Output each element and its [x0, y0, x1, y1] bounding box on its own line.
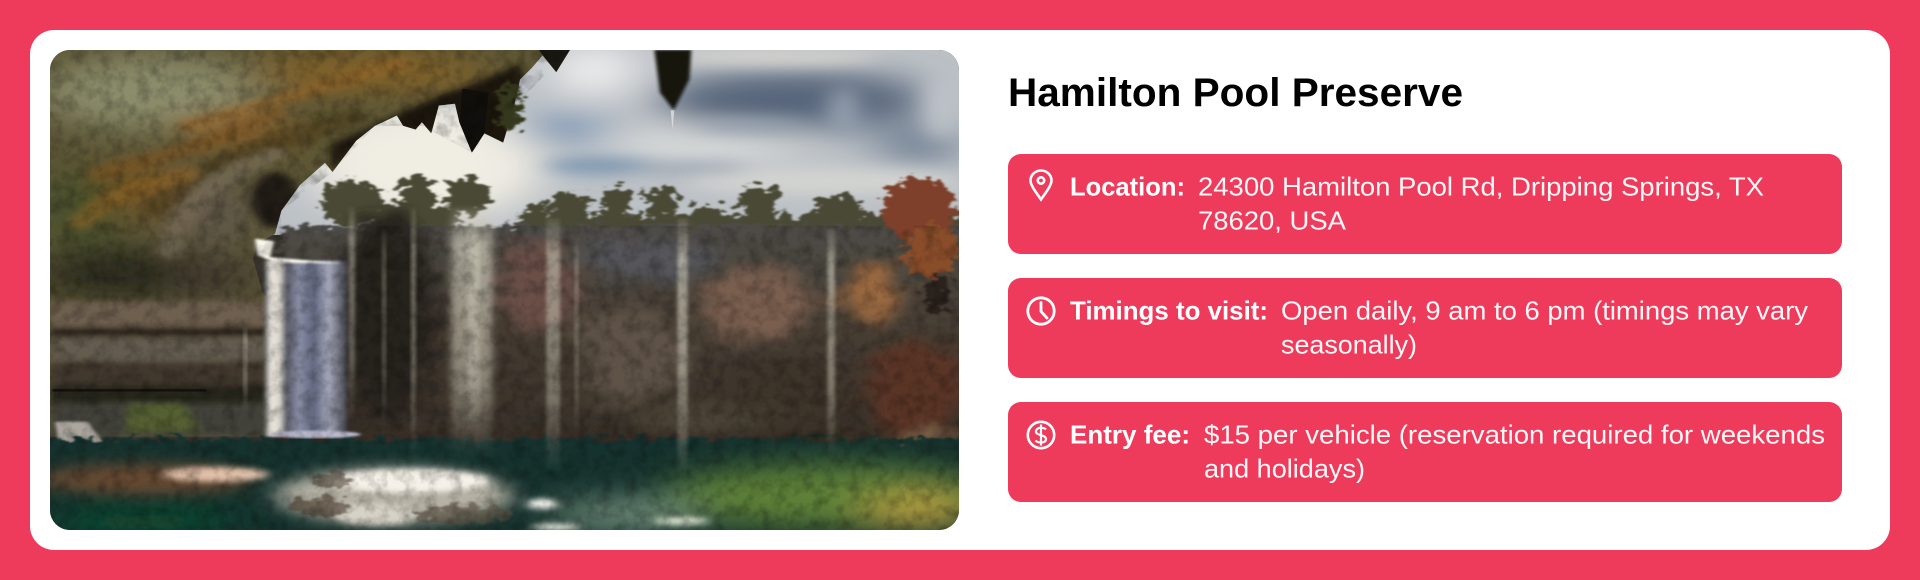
title: Hamilton Pool Preserve — [1008, 71, 1463, 115]
rock ledges — [50, 302, 269, 446]
thin falls — [244, 207, 835, 477]
icon: map pin — [1030, 171, 1052, 200]
panel: location — [1008, 154, 1842, 254]
rock strata streaks — [81, 63, 400, 252]
entry fee value — [1204, 420, 1825, 484]
location label: Location: — [1070, 172, 1185, 202]
treeline — [322, 176, 969, 235]
main waterfall — [255, 239, 361, 438]
icon: clock — [1028, 298, 1054, 324]
entry fee value: and holidays) — [1204, 454, 1365, 484]
cave ceiling and left wall — [50, 50, 558, 436]
timings value — [1281, 296, 1808, 360]
water — [50, 432, 959, 530]
panel: timings — [1008, 278, 1842, 378]
hanging rock — [654, 50, 691, 110]
entry fee label: Entry fee: — [1070, 420, 1190, 450]
timings value: seasonally) — [1281, 330, 1417, 360]
panel: entry fee — [1008, 402, 1842, 502]
entry fee value: $15 per vehicle (reservation required for weekends — [1204, 420, 1825, 450]
foliage fringe — [497, 81, 522, 133]
cliff face — [274, 219, 959, 368]
autumn foliage — [338, 211, 969, 447]
icon: dollar coin — [1028, 422, 1054, 448]
location address — [1198, 172, 1764, 236]
timings label: Timings to visit: — [1070, 296, 1268, 326]
rock and foliage texture — [50, 50, 960, 530]
timings value: Open daily, 9 am to 6 pm (timings may vary — [1281, 296, 1808, 326]
location address: 24300 Hamilton Pool Rd, Dripping Springs, TX — [1198, 172, 1764, 202]
location address: 78620, USA — [1198, 206, 1347, 236]
sky and clouds — [250, 44, 962, 235]
photo: Hamilton Pool waterfall — [34, 44, 1000, 542]
